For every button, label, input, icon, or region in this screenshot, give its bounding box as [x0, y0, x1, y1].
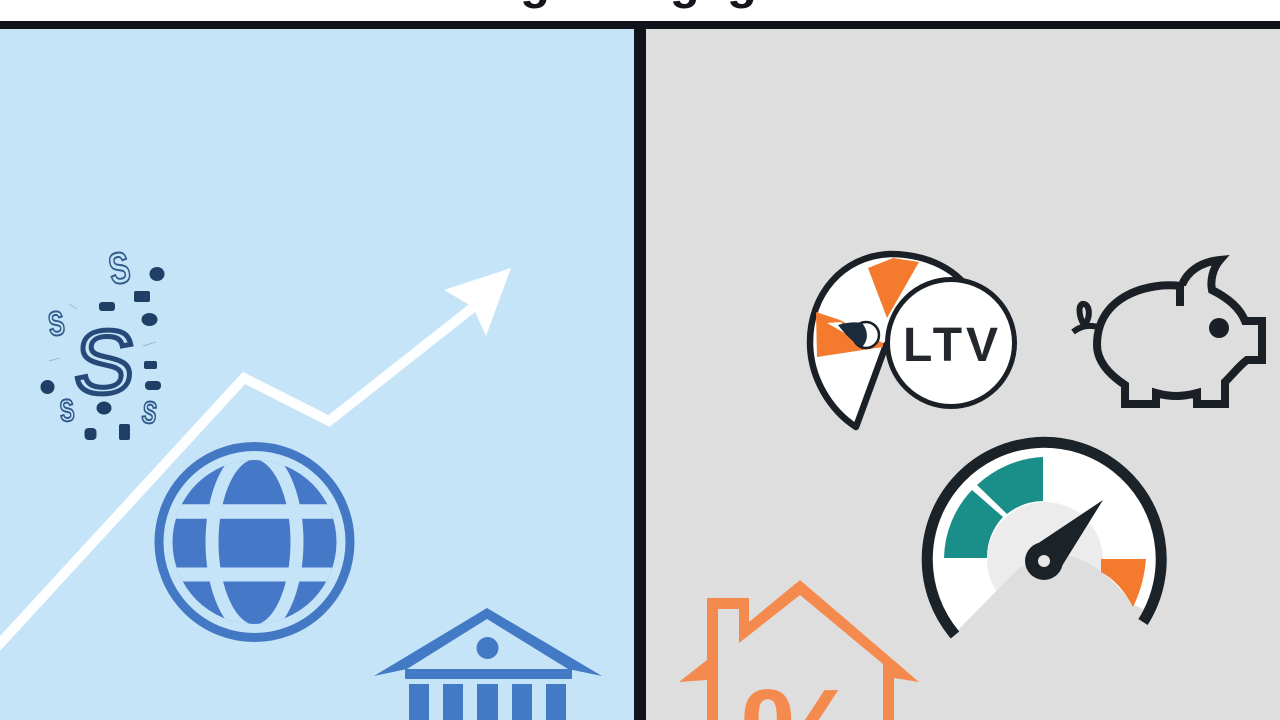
- icon: scattered dollar symbols: S: [140, 394, 159, 431]
- icon: scattered dollar symbols: S: [58, 393, 76, 429]
- icon: scattered dollar symbols: S: [46, 304, 67, 344]
- header rule: [0, 21, 1280, 29]
- icon: LTV pie chart: [810, 254, 1014, 427]
- icon: bank building: [374, 608, 602, 720]
- icon: globe: [159, 446, 350, 638]
- icon: scattered dollar symbols: [40, 244, 164, 440]
- panel: borrower side: [646, 29, 1280, 720]
- icon: piggy bank: [1073, 260, 1262, 404]
- icon: scattered dollar symbols: S: [70, 312, 139, 413]
- panel: global and rates side: [0, 29, 634, 720]
- LTV badge: LTV: [903, 319, 998, 372]
- icon: scattered dollar symbols: S: [105, 244, 134, 295]
- LTV badge: [888, 280, 1014, 406]
- icon: speedometer gauge: [927, 442, 1161, 635]
- centre divider: [634, 21, 646, 720]
- rising trend arrow: [0, 268, 511, 650]
- icon: house with percent sign: [679, 580, 919, 720]
